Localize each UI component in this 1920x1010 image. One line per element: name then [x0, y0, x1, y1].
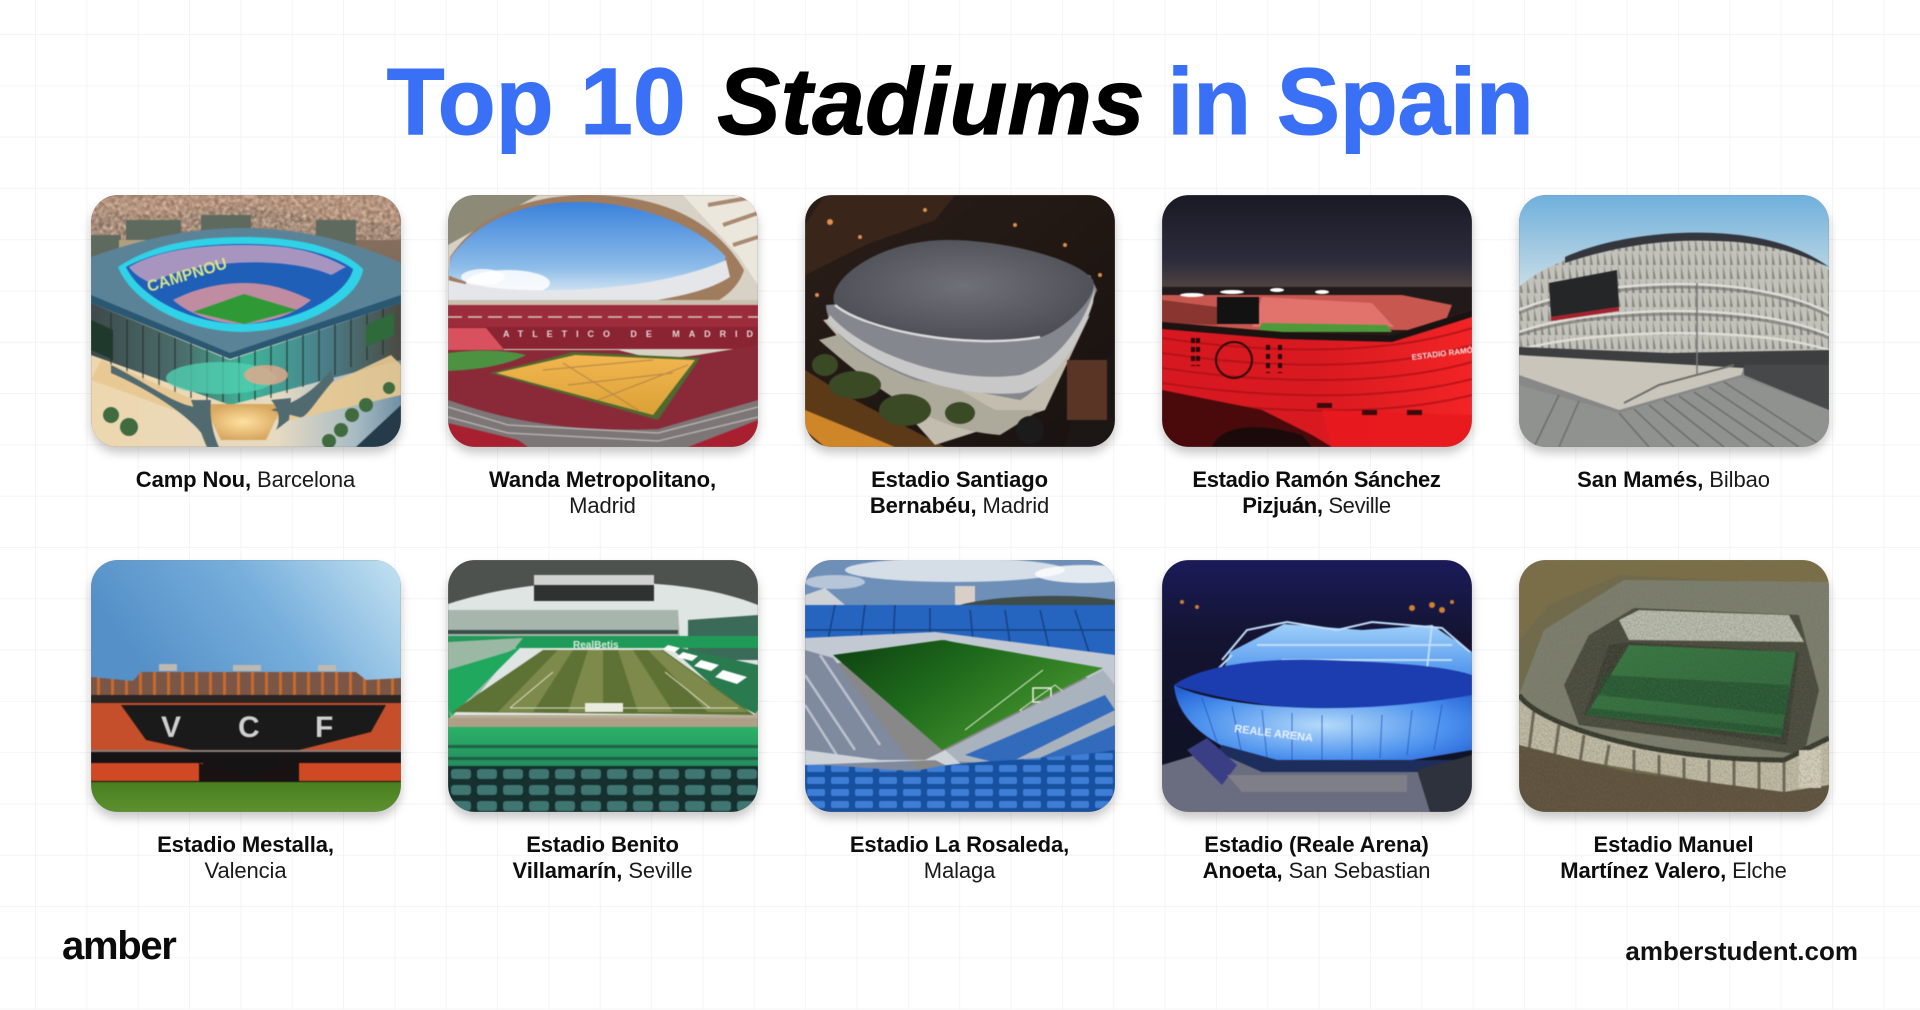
panel: Manuel Martinez Valero — [1514, 560, 1834, 883]
panel: Estadio Mestalla — [86, 560, 406, 883]
caption: Manuel Martinez Valero: Estadio Manuel — [1594, 832, 1753, 857]
photo: La Rosaleda — [804, 560, 1114, 812]
caption: La Rosaleda: Malaga — [924, 858, 995, 883]
website URL: amberstudent.com — [1625, 936, 1858, 966]
caption: Wanda Metropolitano: Wanda Metropolitano, — [489, 467, 716, 492]
photo: Benito Villamarin: RealBetis — [572, 640, 619, 651]
photo: Manuel Martinez Valero — [1518, 560, 1828, 812]
caption: San Mames: San Mamés, Bilbao — [1577, 467, 1770, 492]
photo: Wanda Metropolitano — [448, 195, 758, 447]
caption: Estadio Mestalla — [157, 832, 334, 883]
caption: Estadio Mestalla: Estadio Mestalla, — [157, 832, 334, 857]
caption: Benito Villamarin: Estadio Benito — [526, 832, 679, 857]
panel: Ramon Sanchez Pizjuan — [1157, 195, 1477, 518]
caption: Reale Arena Anoeta: Anoeta, San Sebastian — [1203, 858, 1430, 883]
panel: La Rosaleda — [800, 560, 1120, 883]
caption: La Rosaleda — [850, 832, 1069, 883]
photo: Santiago Bernabeu — [804, 195, 1114, 447]
caption: Ramon Sanchez Pizjuan — [1192, 467, 1441, 518]
caption: Reale Arena Anoeta — [1203, 832, 1430, 883]
caption: Santiago Bernabeu: Estadio Santiago — [871, 467, 1048, 492]
caption: Estadio Mestalla: Valencia — [205, 858, 286, 883]
photo: San Mames — [1518, 195, 1828, 447]
caption: Ramon Sanchez Pizjuan: Estadio Ramón Sánchez — [1192, 467, 1441, 492]
photo: Wanda Metropolitano: ATLETICO DE MADRID — [502, 329, 753, 339]
photo: Camp Nou — [90, 195, 400, 447]
panel: Benito Villamarin — [443, 560, 763, 883]
caption: Wanda Metropolitano — [489, 467, 716, 518]
panel: Reale Arena Anoeta — [1157, 560, 1477, 883]
photo: Reale Arena Anoeta: REALE ARENA — [1233, 723, 1313, 745]
photo: Estadio Mestalla: F — [314, 711, 333, 744]
caption: Manuel Martinez Valero — [1560, 832, 1787, 883]
photo: Estadio Mestalla: V — [160, 711, 181, 744]
caption: Santiago Bernabeu: Bernabéu, Madrid — [870, 493, 1049, 518]
panel: Camp Nou — [86, 195, 406, 492]
caption: Camp Nou: Camp Nou, Barcelona — [136, 467, 355, 492]
photo: Estadio Mestalla — [90, 560, 400, 812]
panel: Santiago Bernabeu — [800, 195, 1120, 518]
caption: Santiago Bernabeu — [870, 467, 1049, 518]
caption: La Rosaleda: Estadio La Rosaleda, — [850, 832, 1069, 857]
caption: Wanda Metropolitano: Madrid — [569, 493, 636, 518]
photo: Reale Arena Anoeta — [1162, 560, 1472, 812]
title: Top 10 Stadiums in Spain — [387, 49, 1533, 155]
photo: Benito Villamarin — [448, 560, 758, 812]
caption: Benito Villamarin — [512, 832, 692, 883]
photo: Ramon Sanchez Pizjuan — [1162, 195, 1472, 447]
photo: Camp Nou: CAMPNOU — [145, 255, 229, 296]
caption: Reale Arena Anoeta: Estadio (Reale Arena) — [1204, 832, 1429, 857]
caption: Manuel Martinez Valero: Martínez Valero, Elche — [1560, 858, 1787, 883]
caption: Benito Villamarin: Villamarín, Seville — [513, 858, 692, 883]
panel: San Mames — [1514, 195, 1834, 492]
photo: Estadio Mestalla: C — [238, 711, 259, 744]
panel: Wanda Metropolitano — [443, 195, 763, 518]
logo: amber: amber — [62, 924, 176, 968]
caption: Ramon Sanchez Pizjuan: Pizjuán, Seville — [1242, 493, 1391, 518]
